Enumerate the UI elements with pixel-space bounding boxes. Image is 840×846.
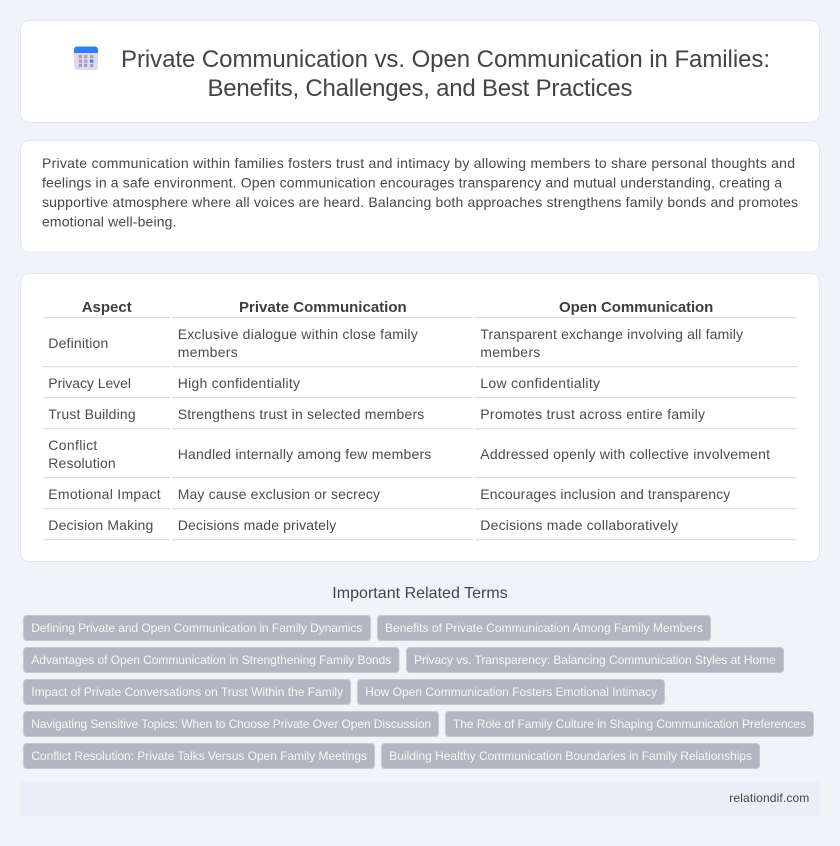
table header: Open Communication — [559, 299, 713, 316]
row: conflict resolution: Addressed openly with collective involvement — [480, 446, 770, 462]
row: emotional impact — [48, 486, 730, 502]
tag: how open communication: How Open Communication Fosters Emotional Intimacy — [365, 685, 657, 699]
row: conflict resolution: Handled internally among few members — [178, 446, 431, 462]
related terms tags — [24, 616, 814, 768]
tag: boundaries: Building Healthy Communication Boundaries in Family Relationships — [389, 749, 752, 763]
heading: important related terms: Important Related Terms — [332, 585, 508, 602]
title: Benefits, Challenges, and Best Practices — [208, 75, 632, 102]
tag: privacy vs transparency: Privacy vs. Transparency: Balancing Communication Styles at Home — [414, 653, 776, 667]
row: privacy level — [48, 375, 600, 391]
tag: family culture: The Role of Family Culture in Shaping Communication Preferences — [453, 717, 806, 731]
row: decision making: Decisions made privately — [178, 517, 336, 533]
tag: advantages: Advantages of Open Communication in Strengthening Family Bonds — [31, 653, 391, 667]
tag: defining — [24, 616, 370, 640]
tag: defining: Defining Private and Open Communication in Family Dynamics — [31, 621, 362, 635]
intro text: feelings in a safe environment. Open communication encourages transparency and mutual understanding, creating a — [42, 174, 782, 190]
intro text: emotional well-being. — [42, 214, 176, 230]
row: definition: Definition — [48, 335, 108, 351]
intro text: Private communication within families fosters trust and intimacy by allowing members to share personal thoughts and — [42, 155, 795, 171]
row: trust building: Strengthens trust in selected members — [178, 406, 424, 422]
row: definition: Exclusive dialogue within close family — [178, 326, 418, 342]
tag: family culture — [446, 712, 814, 736]
tag: navigating — [24, 712, 438, 736]
row: definition: Transparent exchange involving all family — [480, 326, 743, 342]
row: definition: members — [480, 344, 540, 360]
panel: introduction — [20, 140, 820, 252]
row: privacy level: Privacy Level — [48, 375, 131, 391]
row: conflict resolution: Conflict — [48, 437, 97, 453]
table header: Private Communication — [239, 299, 407, 316]
footer bar — [20, 782, 820, 816]
tag: benefits: Benefits of Private Communication Among Family Members — [385, 621, 703, 635]
row: trust building: Promotes trust across entire family — [480, 406, 705, 422]
tag: conflict resolution — [24, 744, 374, 768]
tag: benefits — [378, 616, 710, 640]
tag: conflict resolution: Conflict Resolution: Private Talks Versus Open Family Meetings — [31, 749, 367, 763]
icon: calendar — [74, 46, 98, 70]
tag: navigating: Navigating Sensitive Topics: When to Choose Private Over Open Discussion — [31, 717, 431, 731]
table header — [82, 299, 713, 316]
row: privacy level: High confidentiality — [178, 375, 300, 391]
tag: impact — [24, 680, 350, 704]
intro text: supportive atmosphere where all voices are heard. Balancing both approaches strengthens family bonds and promotes — [42, 194, 798, 210]
row: emotional impact: Encourages inclusion and transparency — [480, 486, 730, 502]
intro text — [42, 155, 798, 230]
panel: comparison table — [20, 274, 820, 562]
footer source: relationdif.com — [729, 791, 809, 805]
row: definition — [48, 326, 743, 360]
row: decision making — [48, 517, 678, 533]
row: emotional impact: May cause exclusion or secrecy — [178, 486, 380, 502]
tag: impact: Impact of Private Conversations on Trust Within the Family — [31, 685, 343, 699]
title — [121, 46, 770, 102]
tag: advantages — [24, 648, 399, 672]
panel: title header — [20, 20, 820, 122]
table header: Aspect — [82, 299, 132, 316]
tag: boundaries — [382, 744, 760, 768]
row: emotional impact: Emotional Impact — [48, 486, 161, 502]
row: conflict resolution: Resolution — [48, 455, 116, 471]
title: Private Communication vs. Open Communication in Families: — [121, 46, 770, 73]
row: trust building — [48, 406, 705, 422]
row: decision making: Decision Making — [48, 517, 153, 533]
row: trust building: Trust Building — [48, 406, 136, 422]
tag: privacy vs transparency — [406, 648, 784, 672]
row: decision making: Decisions made collaboratively — [480, 517, 678, 533]
tag: how open communication — [358, 680, 664, 704]
row: definition: members — [178, 344, 238, 360]
row: privacy level: Low confidentiality — [480, 375, 600, 391]
row: conflict resolution — [48, 437, 770, 471]
